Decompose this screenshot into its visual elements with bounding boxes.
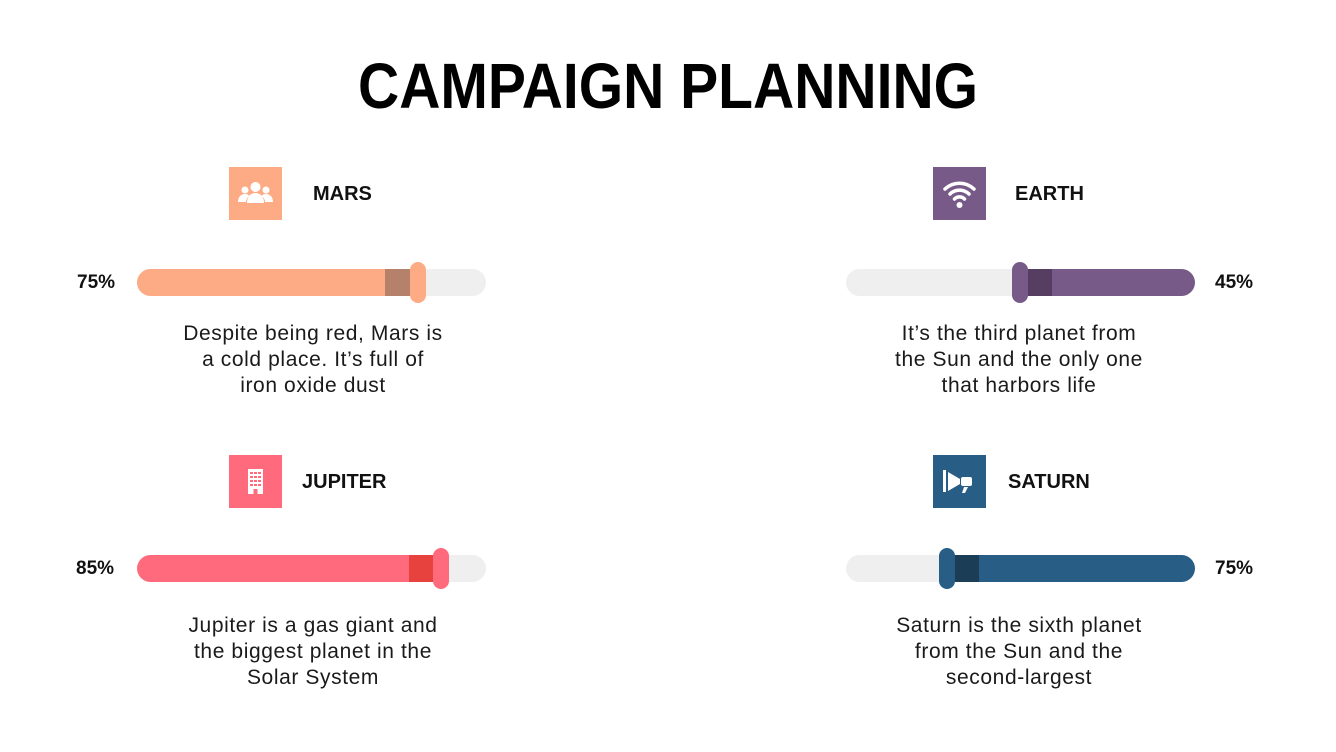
description: Despite being red, Mars is xyxy=(183,322,443,345)
percentage: 75% xyxy=(1215,558,1253,579)
percentage: 85% xyxy=(76,558,114,579)
description: second-largest xyxy=(946,666,1092,689)
description xyxy=(188,614,438,689)
heading: saturn: SATURN xyxy=(1008,471,1090,493)
description: Solar System xyxy=(247,666,379,689)
heading: mars: MARS xyxy=(313,183,372,205)
description xyxy=(896,614,1142,689)
description: that harbors life xyxy=(942,374,1096,397)
description: iron oxide dust xyxy=(240,374,386,397)
panel: jupiter xyxy=(76,455,486,689)
description: a cold place. It’s full of xyxy=(202,348,424,371)
description: the Sun and the only one xyxy=(895,348,1143,371)
description: Saturn is the sixth planet xyxy=(896,614,1142,637)
icon: building xyxy=(229,455,282,508)
description xyxy=(895,322,1143,397)
panel: earth xyxy=(846,167,1253,397)
bar xyxy=(137,548,486,589)
heading: jupiter: JUPITER xyxy=(302,471,386,493)
description: Jupiter is a gas giant and xyxy=(188,614,438,637)
bar xyxy=(846,548,1195,589)
percentage: 75% xyxy=(77,272,115,293)
description: It’s the third planet from xyxy=(902,322,1136,345)
bar xyxy=(846,262,1195,303)
description: from the Sun and the xyxy=(915,640,1123,663)
percentage: 45% xyxy=(1215,272,1253,293)
icon: people xyxy=(229,167,282,220)
panel: saturn xyxy=(846,455,1253,689)
description: the biggest planet in the xyxy=(194,640,432,663)
bar xyxy=(137,262,486,303)
icon: megaphone xyxy=(933,455,986,508)
description xyxy=(183,322,443,397)
heading: earth: EARTH xyxy=(1015,183,1084,205)
icon: wifi xyxy=(933,167,986,220)
panel: mars xyxy=(77,167,486,397)
